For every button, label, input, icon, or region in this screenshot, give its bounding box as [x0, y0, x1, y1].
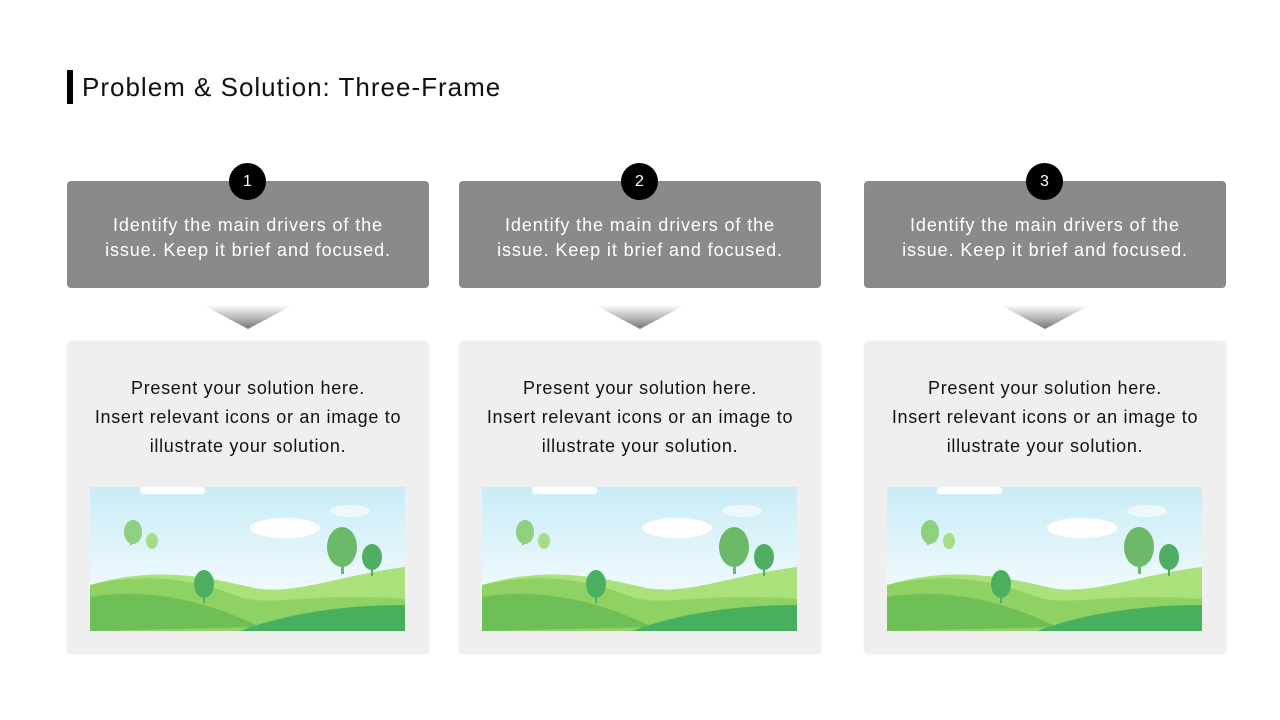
- problem box 1: [67, 181, 429, 288]
- arrow 2: [598, 306, 682, 329]
- arrow 3: [1004, 306, 1086, 329]
- image: landscape: [887, 487, 1202, 631]
- arrow 1: [206, 306, 290, 329]
- problem box 3: [864, 181, 1226, 288]
- image: landscape: [90, 487, 405, 631]
- solution box 3: illustrate your solution.: [947, 436, 1143, 456]
- problem box 2: [459, 181, 821, 288]
- solution box 1: Present your solution here.: [131, 378, 365, 398]
- panel: frame 2: [459, 163, 821, 654]
- solution box 2: Present your solution here.: [523, 378, 757, 398]
- panel: frame 3: [864, 163, 1226, 654]
- solution box 1: [67, 341, 429, 654]
- solution box 2: [459, 341, 821, 654]
- problem box 2: Identify the main drivers of the: [505, 215, 775, 235]
- solution box 3: Insert relevant icons or an image to: [892, 407, 1198, 427]
- problem box 3: Identify the main drivers of the: [910, 215, 1180, 235]
- problem box 3: issue. Keep it brief and focused.: [902, 240, 1188, 260]
- solution box 2: Insert relevant icons or an image to: [487, 407, 793, 427]
- badge 1: [229, 163, 266, 200]
- solution box 3: Present your solution here.: [928, 378, 1162, 398]
- problem box 2: issue. Keep it brief and focused.: [497, 240, 783, 260]
- badge 1: 1: [243, 173, 252, 190]
- badge 3: 3: [1040, 173, 1049, 190]
- badge 2: [621, 163, 658, 200]
- solution box 3: [864, 341, 1226, 654]
- image: landscape: [482, 487, 797, 631]
- badge 2: 2: [635, 173, 644, 190]
- solution box 1: illustrate your solution.: [150, 436, 346, 456]
- badge 3: [1026, 163, 1063, 200]
- problem box 1: Identify the main drivers of the: [113, 215, 383, 235]
- solution box 2: illustrate your solution.: [542, 436, 738, 456]
- title: Problem & Solution: Three-Frame: [82, 72, 501, 102]
- panel: frame 1: [67, 163, 429, 654]
- solution box 1: Insert relevant icons or an image to: [95, 407, 401, 427]
- problem box 1: issue. Keep it brief and focused.: [105, 240, 391, 260]
